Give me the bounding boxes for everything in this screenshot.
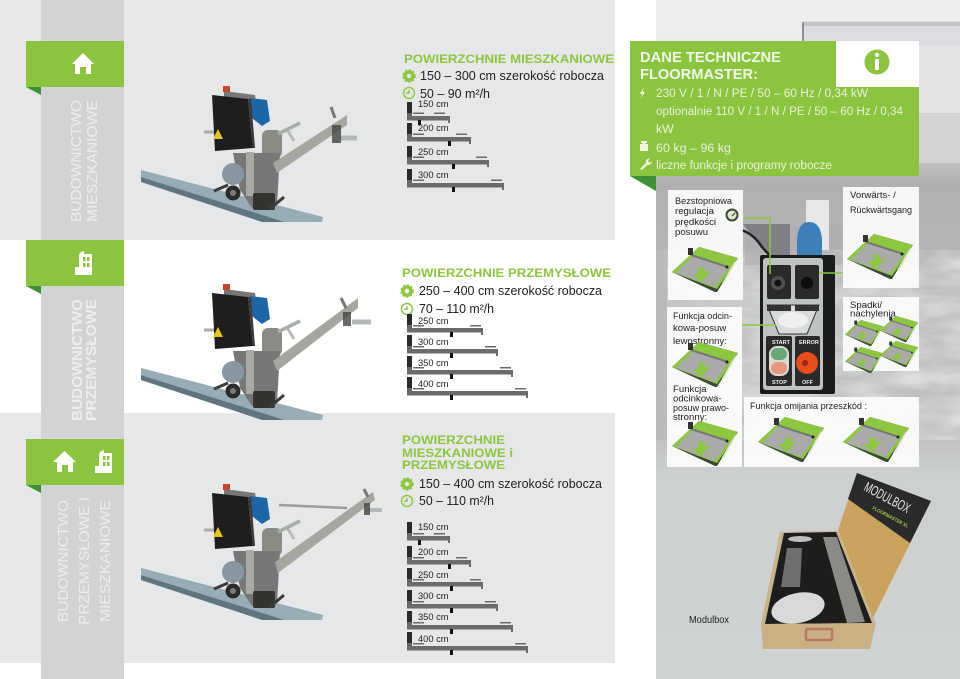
diagram: obstacle one: [758, 417, 824, 462]
diagrams: four slopes: [845, 316, 918, 373]
sidebar label: combined: PRZEMYSŁOWE I: [76, 497, 93, 625]
callout: forward reverse: [843, 187, 919, 288]
callout: speed regulation: posuwu: [675, 227, 708, 238]
diagrams: residential widths: 300 cm: [418, 170, 449, 180]
callout: section functions: [667, 307, 742, 467]
sidebar label: industrial: PRZEMYSŁOWE: [83, 299, 100, 421]
callout: section functions: Funkcja: [673, 384, 707, 395]
ribbon: industrial: [26, 240, 124, 294]
diagram: obstacle two: [843, 417, 909, 462]
diagrams: industrial widths: 250 cm: [418, 316, 449, 326]
panel: technical data: 230 V / 1 / N / PE / 50 – 60 Hz / 0,34 kW: [656, 86, 868, 100]
diagrams: residential widths: [407, 99, 504, 192]
sidebar label: combined: BUDOWNICTWO: [55, 500, 72, 622]
sidebar label: residential: BUDOWNICTWO: [68, 100, 85, 222]
diagrams: combined widths: 300 cm: [418, 591, 449, 601]
callout: obstacle avoidance: [744, 397, 919, 467]
diagrams: combined widths: 250 cm: [418, 570, 449, 580]
diagrams: residential widths: 150 cm: [418, 99, 449, 109]
callout: speed regulation: prędkości: [675, 217, 716, 228]
callout: section functions: lewostronny:: [673, 336, 727, 347]
sidebar strip: [41, 0, 124, 679]
diagrams: residential widths: 250 cm: [418, 147, 449, 157]
callout: section functions: kowa-posuw: [673, 323, 726, 334]
callout: forward reverse: Rückwärtsgang: [850, 205, 912, 216]
panel: technical data: DANE TECHNICZNE: [640, 49, 781, 66]
start stop button: [766, 336, 792, 386]
diagram: forward left: [672, 247, 738, 292]
icon: house: [53, 451, 76, 472]
callout: section functions: stronny:: [673, 412, 707, 423]
emergency stop button: OFF: [802, 380, 814, 386]
icon: gauge: [726, 208, 738, 222]
icon: gear: [403, 70, 415, 82]
modulbox photo: [761, 473, 931, 649]
control panel: [760, 255, 835, 394]
icon: gear: [401, 478, 413, 490]
sidebar label: combined: MIESZKANIOWE: [97, 500, 114, 622]
icon: gear: [401, 285, 413, 297]
diagrams: combined widths: [407, 522, 528, 655]
text: industrial specifications: POWIERZCHNIE PRZEMYSŁOWE: [402, 266, 611, 280]
text: combined specifications: MIESZKANIOWE i: [402, 446, 513, 460]
machine photo: industrial: [141, 284, 371, 420]
icon: lightning: [640, 87, 645, 99]
selector knob: [767, 265, 791, 299]
icon: building on combined ribbon: [95, 450, 112, 473]
diagrams: industrial widths: [407, 314, 528, 400]
panel: technical data: optionalnie 110 V / 1 / N / PE / 50 – 60 Hz / 0,34: [656, 104, 903, 118]
text: residential specifications: [403, 52, 614, 101]
callout: section functions: Funkcja odcin-: [673, 311, 732, 322]
text: industrial specifications: 70 – 110 m²/h: [419, 302, 494, 316]
modulbox photo: FLOORMASTER XL: [871, 505, 909, 530]
text: residential specifications: POWIERZCHNIE MIESZKANIOWE: [404, 52, 614, 66]
text: industrial specifications: 250 – 400 cm szerokość robocza: [419, 284, 602, 298]
panel: technical data: [630, 41, 919, 191]
text: residential specifications: 150 – 300 cm szerokość robocza: [420, 69, 604, 83]
text: combined specifications: 150 – 400 cm szerokość robocza: [419, 477, 602, 491]
icon: weight: [640, 141, 648, 151]
panel: residential background: [0, 0, 615, 240]
modulbox photo: MODULBOX: [862, 479, 914, 516]
sidebar label: residential: MIESZKANIOWE: [84, 100, 101, 222]
machine head behind control panel: [740, 200, 829, 258]
icon: building: [75, 251, 92, 275]
sidebar label: residential: [68, 100, 101, 222]
callout: speed regulation: [668, 190, 743, 300]
emergency stop button: [795, 336, 820, 386]
text: industrial specifications: [401, 266, 611, 316]
icon: wrench: [640, 158, 652, 170]
callout: speed regulation: regulacja: [675, 206, 715, 217]
direction switch: [795, 265, 819, 299]
diagrams: combined widths: 200 cm: [418, 547, 449, 557]
panel: technical background photo: [656, 0, 960, 679]
diagrams: industrial widths: 400 cm: [418, 379, 449, 389]
label: modulbox: Modulbox: [689, 615, 729, 626]
text: combined specifications: 50 – 110 m²/h: [419, 494, 494, 508]
diagram: left section: [672, 342, 738, 387]
diagram: right section: [672, 421, 738, 466]
callout: slopes: [843, 297, 919, 373]
emergency stop button: ERROR: [799, 340, 819, 346]
ribbon: residential: [26, 41, 124, 95]
callout: section functions: posuw prawo-: [673, 403, 729, 414]
callout: slopes: Spadki/: [850, 300, 882, 311]
callout: speed regulation: Bezstopniowa: [675, 196, 733, 207]
diagrams: residential widths: 200 cm: [418, 123, 449, 133]
diagrams: combined widths: 400 cm: [418, 634, 449, 644]
panel: technical data: FLOORMASTER:: [640, 66, 758, 83]
icon: clock: [404, 88, 414, 98]
panel: technical data: liczne funkcje i programy robocze: [656, 158, 832, 172]
start stop button: STOP: [772, 380, 787, 386]
start stop button: START: [772, 340, 791, 346]
diagrams: industrial widths: 300 cm: [418, 337, 449, 347]
diagram: forward right: [847, 234, 913, 279]
section switch: [767, 305, 819, 334]
sidebar label: industrial: BUDOWNICTWO: [69, 299, 86, 421]
panel: combined background: [0, 413, 615, 663]
icon: clock: [402, 304, 412, 314]
text: combined specifications: PRZEMYSŁOWE: [402, 458, 505, 472]
sidebar label: industrial: [69, 299, 100, 421]
ribbon: combined: [26, 439, 124, 493]
text: combined specifications: POWIERZCHNIE: [402, 433, 505, 447]
icon: clock: [402, 496, 412, 506]
panel: technical data: 60 kg – 96 kg: [656, 141, 731, 155]
diagrams: combined widths: 350 cm: [418, 612, 449, 622]
callout: section functions: odcinkowa-: [673, 394, 722, 404]
icon: info: [864, 50, 890, 74]
text: combined specifications: [401, 433, 602, 508]
text: residential specifications: 50 – 90 m²/h: [420, 87, 490, 101]
connector lines: [742, 218, 843, 325]
icon: house: [72, 53, 94, 74]
machine photo: combined: [141, 484, 382, 620]
diagrams: industrial widths: 350 cm: [418, 358, 449, 368]
machine photo: residential: [141, 86, 357, 222]
diagrams: combined widths: 150 cm: [418, 522, 449, 532]
panel: technical data: kW: [656, 122, 674, 136]
callout: slopes: nachylenia: [850, 308, 897, 320]
callout: obstacle avoidance: Funkcja omijania przeszkód :: [750, 401, 867, 412]
callout: forward reverse: Vorwärts- /: [850, 190, 896, 201]
sidebar label: combined: [55, 497, 114, 625]
